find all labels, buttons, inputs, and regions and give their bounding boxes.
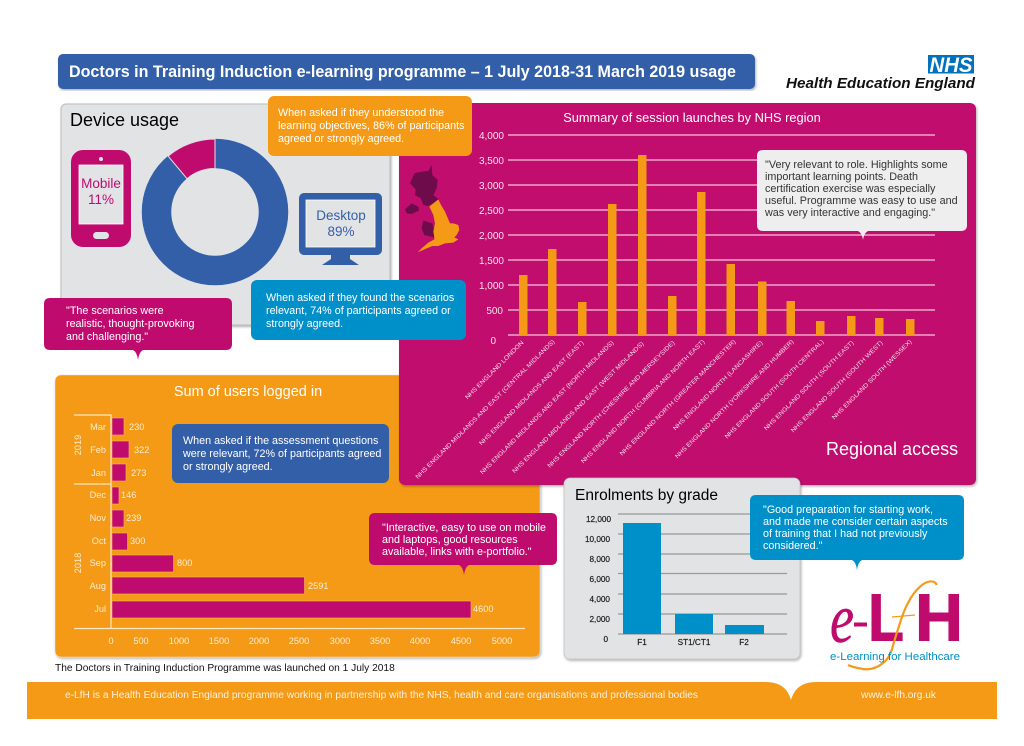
e-LfH logo: e: [830, 581, 854, 658]
panel: regional access: [399, 103, 976, 485]
bar chart: enrolments: 4,000: [590, 595, 610, 604]
bar chart: session launches: 2,000: [479, 231, 504, 242]
icon: desktop monitor: 89%: [327, 224, 355, 239]
heading: enrolments by grade: Enrolments by grade: [575, 487, 718, 504]
title banner: Doctors in Training Induction e-learning programme – 1 July 2018-31 March 2019 usage: [69, 63, 736, 81]
horizontal bar chart: 1500: [209, 636, 229, 646]
horizontal bar chart: 322: [134, 445, 149, 455]
horizontal bar chart: 230: [129, 422, 144, 432]
bar chart: session launches: 2,500: [479, 206, 504, 217]
horizontal bar chart: 4600: [473, 604, 493, 614]
icon: desktop monitor: [299, 193, 382, 265]
bar chart: session launches: 4,000: [479, 131, 504, 142]
horizontal bar chart: 3000: [330, 636, 350, 646]
bar chart: session launches: 0: [490, 336, 496, 347]
e-LfH logo: e-Learning for Healthcare: [830, 651, 960, 663]
icon: mobile phone: Mobile: [81, 176, 121, 191]
callout: learning objectives: [268, 96, 472, 156]
bar chart: enrolments: F1: [637, 638, 647, 647]
footer band: e-LfH is a Health Education England programme working in partnership with the NHS, health and care organisations and professional bodies: [65, 690, 698, 701]
horizontal bar chart: [73, 415, 525, 646]
callout: scenarios quote: realistic, thought-provoking: [66, 318, 194, 330]
bar chart: session launches: NHS ENGLAND NORTH (CUMBRIA AND NORTH EAST): [581, 339, 706, 465]
bar chart: enrolments: 0: [603, 635, 608, 644]
bar chart: session launches: NHS ENGLAND SOUTH (WESSEX): [831, 339, 913, 421]
NHS Health Education England logo: [786, 54, 976, 92]
callout: interactive quote: and laptops, good resources: [382, 534, 518, 546]
bar chart: session launches: NHS ENGLAND NORTH (YORKSHIRE AND HUMBER): [674, 339, 795, 460]
horizontal bar chart: 2019: [73, 435, 83, 455]
horizontal bar chart: Mar: [90, 422, 106, 432]
bar chart: session launches: 3,500: [479, 156, 504, 167]
horizontal bar chart: Aug: [90, 581, 106, 591]
bar chart: enrolments: [585, 514, 787, 647]
callout: good preparation quote: [750, 495, 964, 570]
e-LfH logo: L: [868, 582, 904, 656]
bar chart: session launches: 3,000: [479, 181, 504, 192]
heading: regional access: Regional access: [826, 439, 958, 459]
horizontal bar chart: 146: [121, 490, 136, 500]
horizontal bar chart: 4000: [410, 636, 430, 646]
callout: interactive quote: [369, 513, 557, 575]
bar chart: session launches: 1,000: [479, 281, 504, 292]
horizontal bar chart: 273: [131, 468, 146, 478]
horizontal bar chart: Jan: [91, 468, 106, 478]
bar chart: enrolments: 10,000: [585, 535, 610, 544]
bar chart: enrolments: F2: [739, 638, 749, 647]
horizontal bar chart: 239: [126, 513, 141, 523]
horizontal bar chart: 2018: [73, 553, 83, 573]
bar chart: enrolments: ST1/CT1: [678, 638, 711, 647]
icon: UK map: [405, 165, 459, 252]
horizontal bar chart: Oct: [92, 536, 106, 546]
horizontal bar chart: 2500: [289, 636, 309, 646]
horizontal bar chart: 4500: [451, 636, 471, 646]
callout: good preparation quote: considered.": [763, 540, 823, 552]
horizontal bar chart: Dec: [90, 490, 106, 500]
callout: scenarios quote: "The scenarios were: [66, 305, 164, 317]
callout: assessment questions: or strongly agreed.: [183, 461, 273, 473]
callout: interactive quote: available, links with e-portfolio.": [382, 546, 532, 558]
heading: sum of users logged in: Sum of users logged in: [174, 384, 322, 400]
horizontal bar chart: Sep: [90, 558, 106, 568]
icon: mobile phone: [71, 150, 131, 247]
horizontal bar chart: Feb: [90, 445, 106, 455]
bar chart: session launches: [415, 131, 935, 481]
horizontal bar chart: Jul: [94, 604, 106, 614]
bar chart: session launches: 500: [486, 306, 503, 317]
callout: scenarios relevant: [251, 280, 466, 340]
panel: device usage: [61, 104, 390, 325]
heading: device usage: Device usage: [70, 110, 179, 130]
callout: good preparation quote: and made me consider certain aspects: [763, 516, 948, 528]
bar chart: session launches: NHS ENGLAND NORTH (CHESHIRE AND MERSEYSIDE): [547, 340, 676, 470]
callout: assessment questions: [172, 424, 389, 483]
horizontal bar chart: 500: [133, 636, 149, 646]
e-LfH logo: [830, 581, 963, 669]
bar chart: session launches: 1,500: [479, 256, 504, 267]
callout: scenarios relevant: strongly agreed.: [266, 318, 343, 330]
bar chart: enrolments: 2,000: [590, 615, 610, 624]
horizontal bar chart: 2000: [249, 636, 269, 646]
callout: learning objectives: learning objectives, 86% of participants: [278, 120, 464, 132]
icon: desktop monitor: Desktop: [316, 208, 366, 223]
callout: scenarios relevant: relevant, 74% of participants agreed or: [266, 305, 451, 317]
callout: assessment questions: When asked if the assessment questions: [183, 435, 378, 447]
callout: learning objectives: When asked if they understood the: [278, 107, 444, 119]
callout: assessment questions: were relevant, 72% of participants agreed: [182, 448, 381, 460]
callout: scenarios quote: [44, 298, 232, 360]
NHS Health Education England logo: NHS: [930, 54, 972, 77]
bar chart: session launches: NHS ENGLAND LONDON: [465, 340, 525, 401]
icon: mobile phone: 11%: [88, 192, 114, 207]
horizontal bar chart: 5000: [492, 636, 512, 646]
panel: sum of users logged in: [55, 375, 540, 657]
horizontal bar chart: 0: [108, 636, 114, 646]
bar chart: session launches: NHS ENGLAND NORTH (LANCASHIRE): [672, 340, 764, 432]
launch note: The Doctors in Training Induction Programme was launched on 1 July 2018: [55, 663, 395, 674]
heading: session launches chart: Summary of session launches by NHS region: [563, 110, 821, 125]
callout: learning objectives: agreed or strongly agreed.: [278, 133, 404, 145]
bar chart: enrolments: 6,000: [590, 575, 610, 584]
horizontal bar chart: 2591: [308, 581, 328, 591]
bar chart: session launches: NHS ENGLAND MIDLANDS AND EAST (CENTRAL MIDLANDS): [415, 339, 556, 481]
callout: good preparation quote: of training that I had not previously: [763, 528, 928, 540]
footer band: [27, 682, 997, 719]
bar chart: session launches: NHS ENGLAND MIDLANDS AND EAST (NORTH MIDLANDS): [480, 340, 615, 476]
callout: relevant to role quote: useful. Programme was easy to use and: [765, 195, 958, 207]
callout: relevant to role quote: was very interactive and engaging.": [764, 207, 935, 219]
horizontal bar chart: 3500: [370, 636, 390, 646]
panel: enrolments by grade: [564, 478, 800, 659]
horizontal bar chart: 800: [177, 558, 192, 568]
bar chart: session launches: NHS ENGLAND SOUTH (SOUTH CENTRAL): [724, 339, 825, 440]
donut chart: [156, 139, 274, 270]
horizontal bar chart: 300: [130, 536, 145, 546]
bar chart: enrolments: 8,000: [590, 555, 610, 564]
callout: relevant to role quote: important learning points. Death: [765, 171, 918, 183]
callout: good preparation quote: "Good preparation for starting work,: [763, 504, 933, 516]
horizontal bar chart: Nov: [90, 513, 106, 523]
bar chart: session launches: NHS ENGLAND NORTH (GREATER MANCHESTER): [619, 339, 737, 457]
callout: scenarios quote: and challenging.": [66, 331, 148, 343]
title banner: [58, 54, 755, 89]
callout: relevant to role quote: [757, 150, 967, 240]
callout: relevant to role quote: certification exercise was especially: [765, 183, 936, 195]
bar chart: session launches: NHS ENGLAND SOUTH (SOUTH WEST): [790, 340, 884, 434]
bar chart: session launches: NHS ENGLAND SOUTH (SOUTH EAST): [763, 340, 855, 432]
bar chart: enrolments: 12,000: [586, 515, 611, 524]
callout: relevant to role quote: "Very relevant to role. Highlights some: [765, 159, 948, 171]
bar chart: session launches: NHS ENGLAND MIDLANDS AND EAST (EAST): [479, 340, 585, 447]
footer band: www.e-lfh.org.uk: [860, 690, 937, 701]
callout: interactive quote: "Interactive, easy to use on mobile: [382, 522, 546, 534]
e-LfH logo: H: [915, 582, 963, 656]
bar chart: session launches: NHS ENGLAND MIDLANDS AND EAST (WEST MIDLANDS): [512, 341, 645, 475]
NHS Health Education England logo: Health Education England: [786, 75, 976, 92]
callout: scenarios relevant: When asked if they found the scenarios: [266, 292, 454, 304]
horizontal bar chart: 1000: [169, 636, 189, 646]
